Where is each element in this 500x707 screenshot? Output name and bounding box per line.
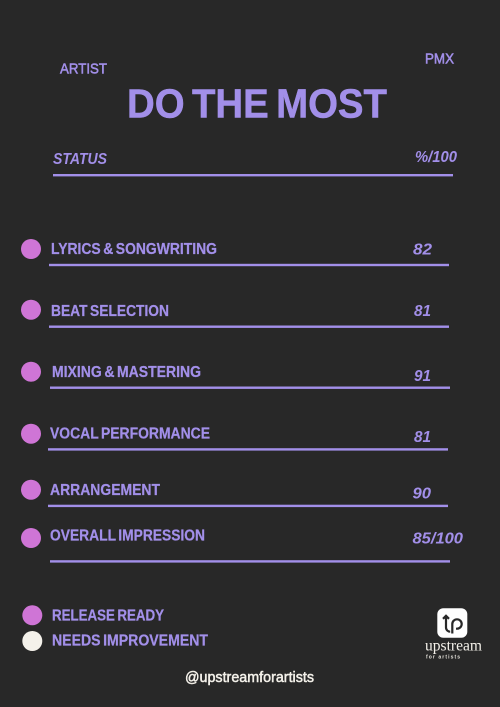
row: lyrics and songwriting [21,239,449,266]
legend: needs improvement: NEEDS IMPROVEMENT [52,632,208,650]
row: vocal performance [21,424,448,451]
legend: release ready [22,605,165,625]
row: vocal performance: VOCAL PERFORMANCE [50,425,210,442]
tagline: for artists [426,654,460,660]
table header: score: %/100 [415,149,457,166]
row: mixing and mastering: MIXING & MASTERING [52,364,201,381]
row: overall impression: OVERALL IMPRESSION [50,528,205,545]
logo: upstream for artists [425,608,483,660]
table header: status: STATUS [53,151,108,168]
row: arrangement: 90 [412,485,431,502]
row: overall impression [21,528,463,563]
legend: release ready: RELEASE READY [52,608,165,624]
row: beat selection [21,300,449,328]
row: mixing and mastering [21,362,450,389]
row: vocal performance: 81 [414,429,431,446]
title: DO THE MOST [127,81,387,127]
legend: needs improvement [22,631,208,651]
row: overall impression: 85/100 [412,530,463,547]
row: beat selection: 81 [414,303,431,320]
row: mixing and mastering: 91 [414,368,431,385]
social handle: @upstreamforartists [185,670,314,686]
row: arrangement: ARRANGEMENT [50,482,160,499]
row: lyrics and songwriting: 82 [413,241,432,258]
row: arrangement [21,480,448,507]
icon: upstream arrow mark [437,608,467,638]
artist name: PMX [425,51,454,67]
wordmark: upstream [425,638,483,655]
row: lyrics and songwriting: LYRICS & SONGWRITING [51,241,217,258]
row: beat selection: BEAT SELECTION [51,303,169,320]
label: artist: ARTIST [60,61,107,77]
